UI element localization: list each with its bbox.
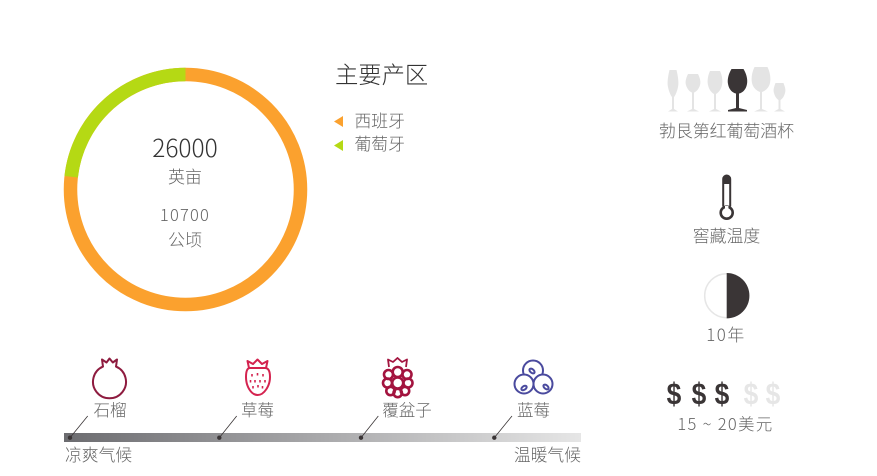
heading: main regions: 主要产区 [335, 62, 428, 88]
label: burgundy wine glass: 勃艮第红葡萄酒杯 [659, 122, 794, 141]
glass 4: selected burgundy glass [728, 69, 747, 112]
icon: raspberry [383, 358, 412, 397]
icon row: price dollars: $ [667, 377, 681, 412]
acres value: 26000 [152, 130, 218, 165]
climate gradient bar [64, 433, 581, 442]
glass 3 [708, 71, 722, 112]
donut segment: Spain [70, 74, 300, 304]
donut chart: planted area [70, 74, 300, 304]
icon row: price dollars: $ [692, 377, 706, 412]
icon: half circle aging [705, 273, 749, 318]
acres unit: 英亩 [168, 168, 202, 187]
label: warm climate: 温暖气候 [514, 446, 581, 465]
label: blueberry: 蓝莓 [517, 401, 550, 420]
icon row: price dollars: $ [744, 377, 758, 412]
hectares unit: 公顷 [168, 231, 202, 250]
icon row: price dollars: $ [766, 377, 780, 412]
hectares value: 10700 [160, 202, 210, 226]
label: cellar temperature: 窖藏温度 [693, 227, 760, 246]
icon: blueberries [514, 360, 552, 394]
label: pomegranate: 石榴 [94, 401, 126, 420]
climate markers [68, 416, 512, 440]
legend [334, 112, 405, 154]
legend marker: Portugal [334, 140, 343, 151]
icon: thermometer [721, 175, 733, 219]
icon: strawberry [246, 360, 270, 395]
label: aging years: 10年 [706, 321, 746, 346]
legend marker: Spain [334, 116, 343, 127]
icon row: wine glasses [668, 67, 785, 112]
icon row: price dollars [667, 377, 780, 412]
label: raspberry: 覆盆子 [382, 401, 432, 420]
icon row: price dollars: $ [715, 377, 729, 412]
icon: pomegranate [93, 358, 126, 398]
legend label: Spain: 西班牙 [354, 112, 405, 131]
glass 1 [668, 70, 678, 112]
glass 6 [774, 83, 785, 112]
label: cool climate: 凉爽气候 [65, 446, 132, 465]
glass 5 [752, 67, 770, 112]
glass 2 [686, 74, 700, 112]
label: price: 15 ~ 20美元 [677, 411, 774, 435]
donut segment: Portugal [71, 74, 186, 177]
label: strawberry: 草莓 [241, 401, 274, 420]
legend label: Portugal: 葡萄牙 [354, 135, 405, 154]
